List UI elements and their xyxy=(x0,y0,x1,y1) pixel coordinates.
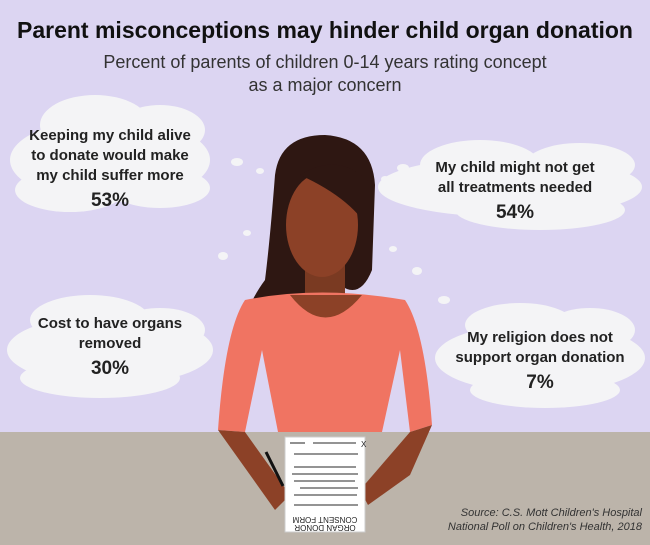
text: top right xyxy=(435,159,595,223)
source: National Poll on Children's Health, 2018 xyxy=(448,521,642,533)
text: top left: my child suffer more xyxy=(36,167,184,184)
text: top left: Keeping my child alive xyxy=(29,127,191,144)
source: Source: C.S. Mott Children's Hospital xyxy=(461,507,642,519)
subtitle: as a major concern xyxy=(248,75,402,95)
woman xyxy=(218,135,432,510)
subtitle xyxy=(103,52,547,95)
text: top right: 54% xyxy=(496,202,534,223)
text: bottom right: 7% xyxy=(526,372,554,393)
text: bottom left xyxy=(38,315,182,379)
text: bottom left: removed xyxy=(79,335,141,352)
subtitle: Percent of parents of children 0-14 years rating concept xyxy=(103,52,547,72)
text: top left xyxy=(29,127,191,211)
source xyxy=(448,507,642,533)
text: bottom left: Cost to have organs xyxy=(38,315,182,332)
pen xyxy=(266,452,283,486)
text: top right: My child might not get xyxy=(435,159,595,176)
consent form xyxy=(285,437,367,532)
title: Parent misconceptions may hinder child organ donation xyxy=(17,17,633,43)
text: bottom left: 30% xyxy=(91,358,129,379)
cloud: top right xyxy=(378,140,642,230)
consent form: ORGAN DONOR xyxy=(294,523,356,532)
consent form: CONSENT FORM xyxy=(292,515,357,524)
text: bottom right: My religion does not xyxy=(467,329,613,346)
cloud: bottom left xyxy=(7,295,213,398)
text: top left: to donate would make xyxy=(31,147,189,164)
text: bottom right xyxy=(455,329,625,393)
cloud: bottom right xyxy=(435,303,645,408)
consent form: X xyxy=(361,440,367,449)
desk xyxy=(0,432,650,545)
text: top left: 53% xyxy=(91,190,129,211)
cloud: top left xyxy=(10,95,210,212)
text: bottom right: support organ donation xyxy=(455,349,625,366)
text: top right: all treatments needed xyxy=(438,179,592,196)
thought dots xyxy=(218,158,450,304)
